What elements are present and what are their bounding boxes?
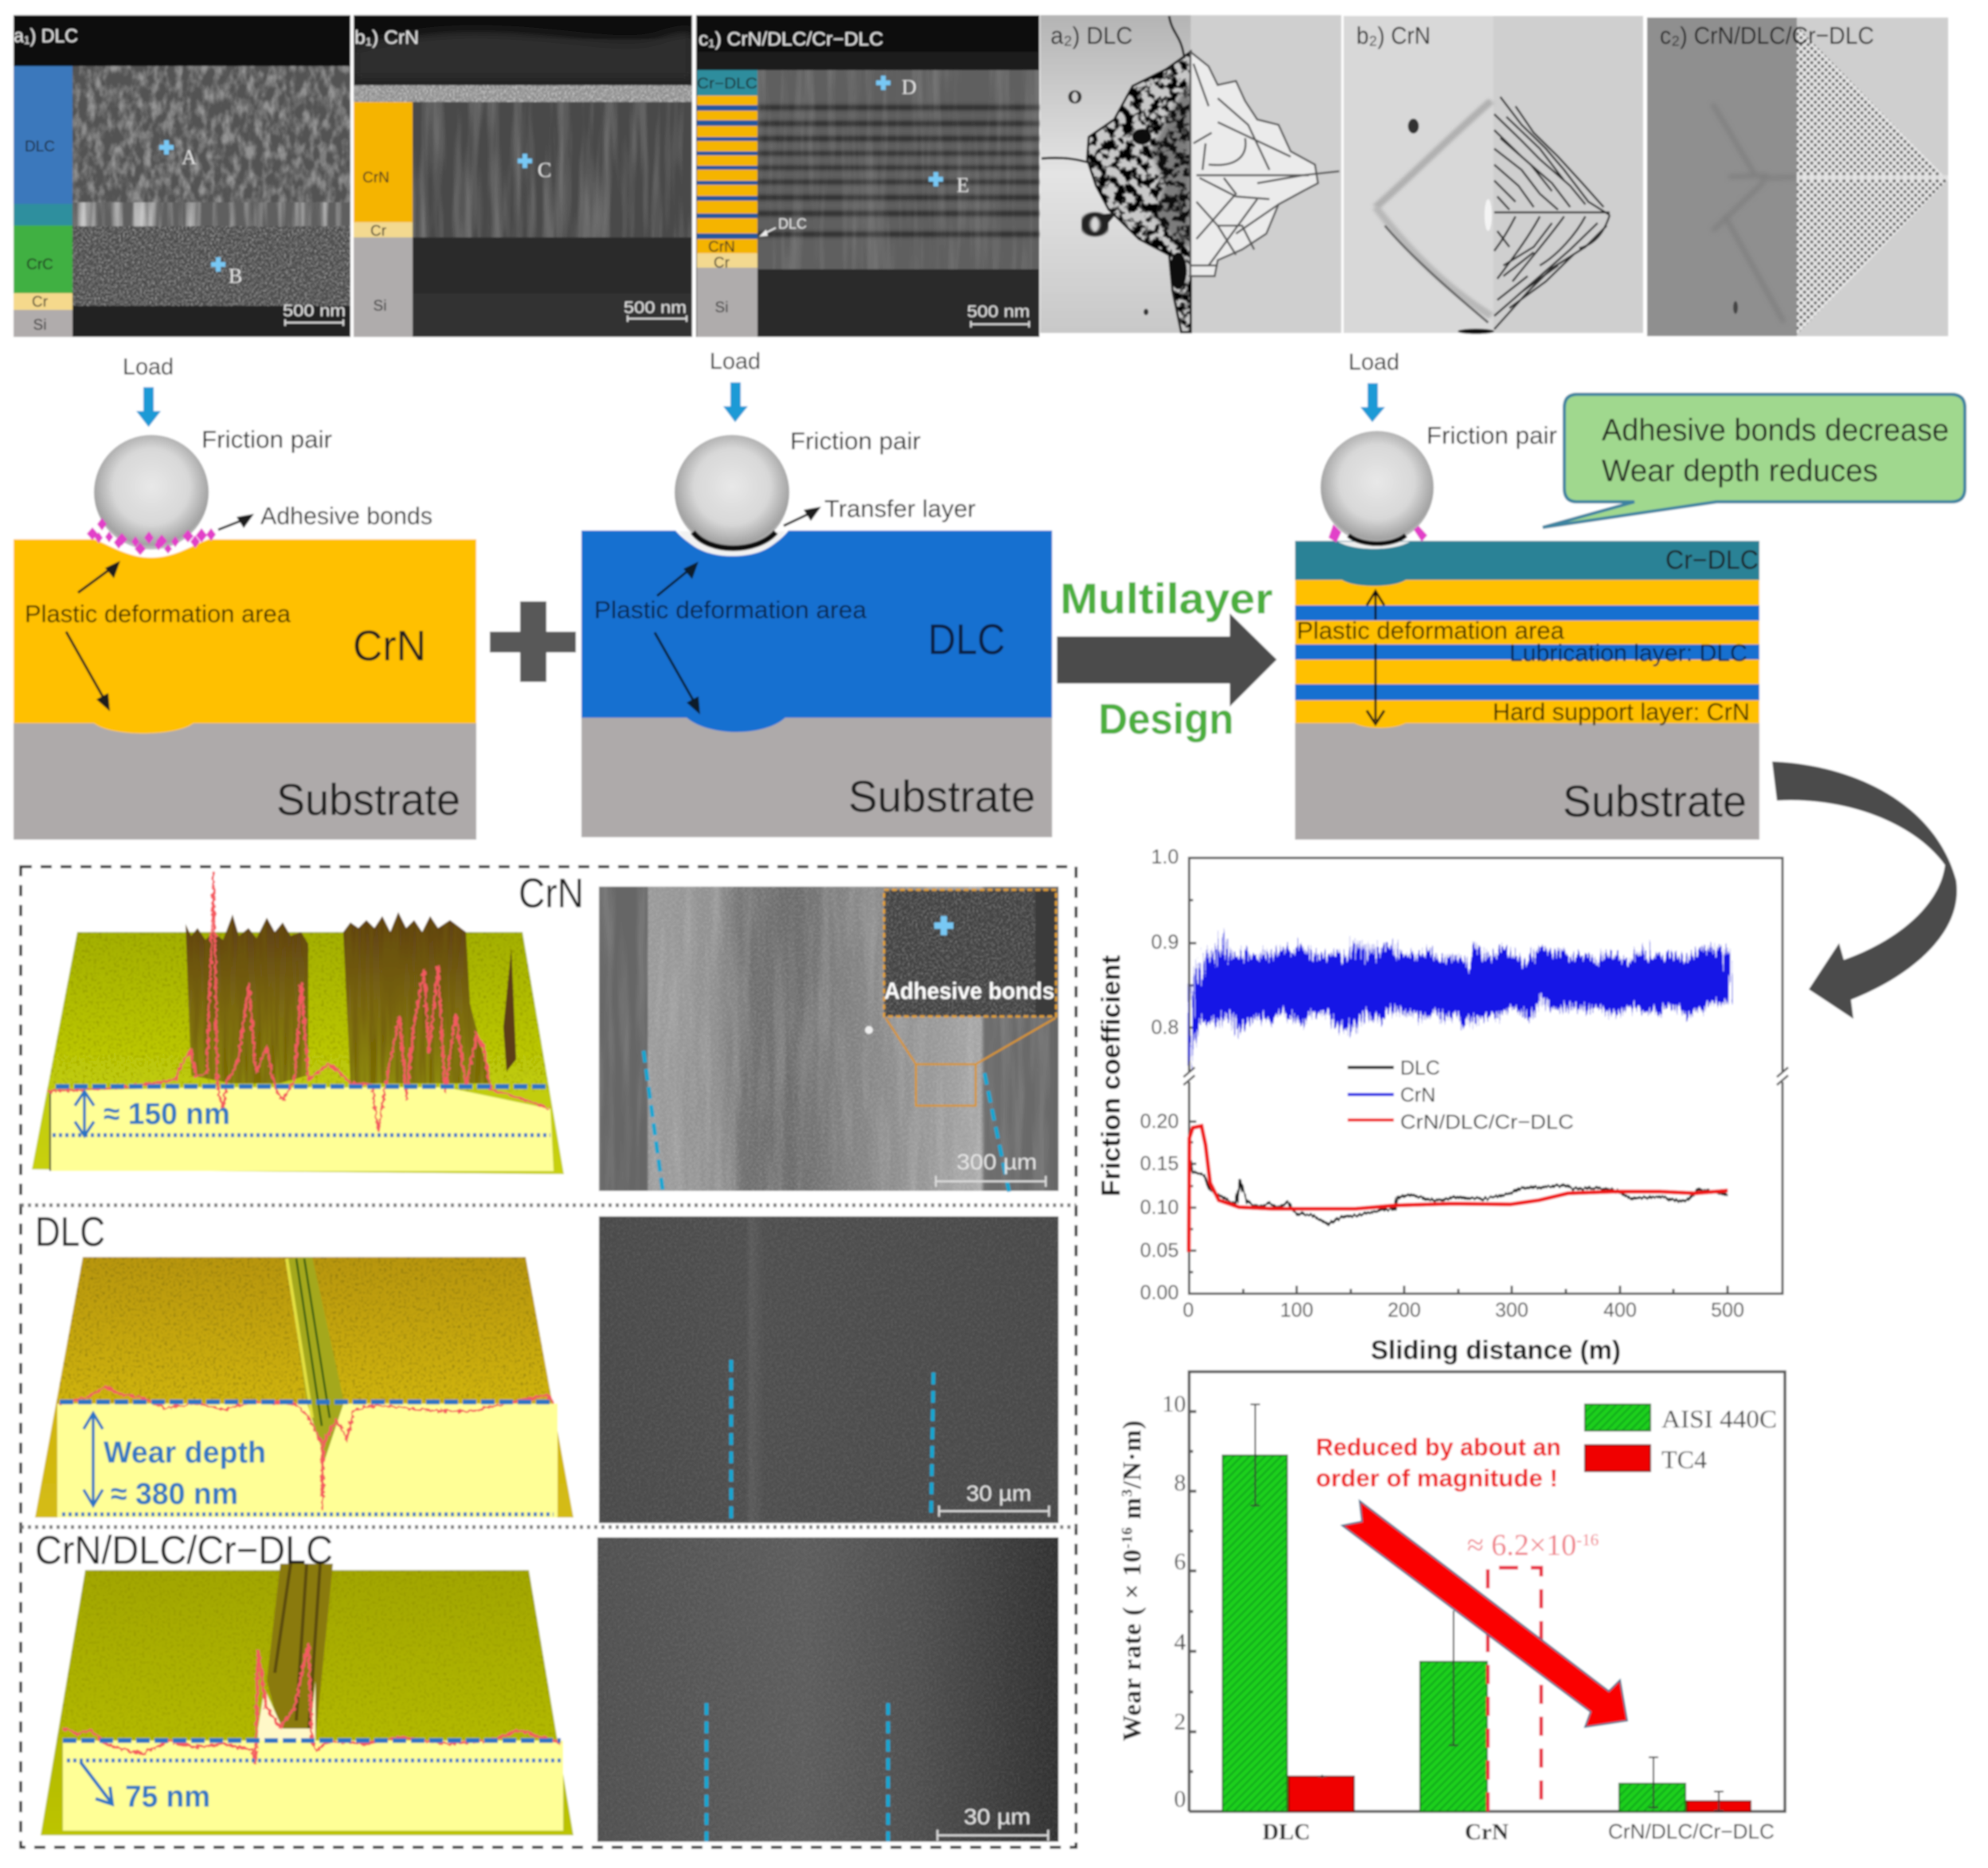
layer labels: CrC <box>26 257 53 273</box>
label: Multilayer: Multilayer <box>1060 575 1273 623</box>
y axis tick labels: 2 <box>1174 1709 1186 1735</box>
scale bar 500 nm <box>283 302 346 326</box>
label: CrN/DLC/Cr-DLC: CrN/DLC/Cr−DLC <box>35 1528 333 1572</box>
callout: plastic deformation area: Plastic deformation area <box>25 600 292 628</box>
series: DLC <box>1189 1149 1728 1224</box>
legend <box>1585 1404 1777 1474</box>
panel: c1 multilayer cross-section SEM <box>696 15 1039 337</box>
y axis tick labels: 0.15 <box>1140 1153 1179 1175</box>
y axis title: 3 <box>1119 1490 1136 1497</box>
label: 380 nm: ≈ 380 nm <box>111 1478 238 1511</box>
wear track edges <box>731 1360 933 1523</box>
legend <box>1348 1057 1574 1134</box>
panel: b1 CrN cross-section SEM <box>354 15 692 337</box>
label: Design: Design <box>1098 695 1234 743</box>
SEM: DLC wear track <box>599 1216 1059 1523</box>
layer labels <box>25 139 55 334</box>
x axis tick labels: 200 <box>1387 1299 1421 1322</box>
layer labels: Si <box>33 317 46 334</box>
bars: DLC <box>1223 1404 1354 1811</box>
panel: wear track comparison <box>21 867 1076 1847</box>
axes <box>1189 1372 1785 1811</box>
annotation: reduced by an order of magnitude: order of magnitude ! <box>1316 1464 1558 1492</box>
callout: transfer layer: Transfer layer <box>824 495 976 523</box>
icon: plus sign <box>490 601 576 682</box>
layer labels: Si <box>715 300 728 316</box>
series: CrN/DLC/Cr-DLC <box>1189 1126 1728 1252</box>
x axis labels: DLC <box>1262 1819 1310 1845</box>
y axis title: -16 <box>1119 1527 1136 1549</box>
panel: a2 DLC indentation <box>1040 15 1341 335</box>
label: a1 DLC: a₁) DLC <box>14 25 78 47</box>
zoom guide box <box>886 1018 1055 1106</box>
icon: friction ball with transfer layer <box>675 435 789 550</box>
label: DLC: DLC <box>928 616 1005 664</box>
y axis tick labels: 8 <box>1174 1470 1186 1496</box>
label: Substrate: Substrate <box>276 774 460 824</box>
legend: CrN <box>1400 1084 1435 1106</box>
scale bar 500 nm: 500 nm <box>624 299 687 317</box>
label: b2 CrN: b₂) CrN <box>1356 22 1430 49</box>
label: wear depth: Wear depth <box>104 1436 266 1470</box>
y axis tick labels: 6 <box>1174 1549 1186 1575</box>
scale bar 30 um <box>937 1804 1048 1841</box>
x axis tick labels: 400 <box>1603 1299 1637 1322</box>
label: Friction pair: Friction pair <box>790 427 921 455</box>
label: 6.2e-16 estimate: -16 <box>1576 1530 1599 1549</box>
wear track edges <box>706 1703 888 1842</box>
markers D and E: D <box>902 76 917 99</box>
wear track edges <box>644 1051 1009 1192</box>
label: Substrate: Substrate <box>848 771 1035 821</box>
y axis title: /N·m) <box>1118 1420 1147 1490</box>
callout: benefits speech bubble <box>1543 394 1965 527</box>
scale bar 30 um: 30 µm <box>966 1481 1031 1506</box>
arrow: reduction trend <box>1342 1501 1627 1727</box>
chart: wear rate bars <box>1118 1372 1785 1845</box>
y axis title: Friction coefficient <box>1096 955 1125 1196</box>
label: hard support layer: Hard support layer: CrN <box>1493 698 1750 726</box>
SEM: CrN wear track <box>599 887 1059 1192</box>
icon: friction ball <box>94 435 209 550</box>
x axis labels: CrN/DLC/Cr−DLC <box>1608 1819 1775 1843</box>
arrow: wear depth multilayer <box>80 1762 112 1804</box>
axes <box>1184 858 1788 1294</box>
label: DLC: DLC <box>35 1209 105 1255</box>
label: 150 nm: ≈ 150 nm <box>104 1098 230 1131</box>
y axis tick labels: 0.9 <box>1151 931 1179 954</box>
arrow: multilayer design <box>1057 613 1277 707</box>
callout: benefits speech bubble: Wear depth reduces <box>1602 454 1878 488</box>
inset: adhesive bonds <box>884 890 1056 1016</box>
y axis tick labels: 0.20 <box>1140 1110 1179 1133</box>
arrow: curved to results <box>1772 762 1957 1019</box>
marker A and B: A <box>182 146 197 169</box>
label: CrN: CrN <box>519 871 584 917</box>
y axis tick labels: 0.05 <box>1140 1239 1179 1262</box>
scale bar 500 nm: 500 nm <box>283 302 346 320</box>
icon: load arrow <box>723 382 748 422</box>
bars: CrN with estimate <box>1420 1568 1541 1811</box>
marker C: C <box>538 159 551 182</box>
callout: adhesive bonds: Adhesive bonds <box>260 502 432 530</box>
icon: adhesive bond particles <box>87 518 216 555</box>
annotation: reduced by an order of magnitude <box>1316 1433 1561 1492</box>
callout: benefits speech bubble: Adhesive bonds decrease <box>1602 413 1949 448</box>
label: Friction pair: Friction pair <box>202 425 332 453</box>
callout: plastic deformation area: Plastic deformation area <box>594 596 867 624</box>
3D profile: CrN/DLC/Cr-DLC <box>41 1564 574 1835</box>
legend: TC4 <box>1661 1445 1707 1474</box>
x axis tick labels: 300 <box>1495 1299 1528 1322</box>
y axis tick labels: 0 <box>1174 1786 1186 1812</box>
label: 6.2e-16 estimate: ≈ 6.2×10 <box>1467 1529 1576 1562</box>
x axis tick labels: 0 <box>1183 1299 1194 1322</box>
x axis tick labels: 500 <box>1711 1299 1744 1322</box>
series: CrN <box>1189 934 1728 1066</box>
y axis tick labels: 10 <box>1162 1391 1186 1417</box>
inset: adhesive bonds: Adhesive bonds <box>884 978 1055 1004</box>
layer labels: Si <box>374 298 386 315</box>
y axis tick labels <box>1140 846 1179 1304</box>
x axis tick labels: 100 <box>1280 1299 1313 1322</box>
schematic: multilayer coating <box>1295 350 1965 840</box>
scale bar 300 um: 300 µm <box>957 1149 1037 1174</box>
3D profile: DLC <box>35 1257 573 1518</box>
label: a2 DLC: a₂) DLC <box>1051 22 1133 49</box>
icon: load arrow <box>1360 383 1385 422</box>
callout: plastic deformation area <box>594 562 867 715</box>
x axis title: Sliding distance (m) <box>1371 1335 1621 1365</box>
arrow: wear depth DLC <box>84 1413 103 1506</box>
callout: plastic deformation area <box>25 561 292 711</box>
label: b1 CrN: b₁) CrN <box>354 27 419 49</box>
label: Load: Load <box>710 349 761 374</box>
label: 75 nm: 75 nm <box>125 1780 210 1814</box>
chart: friction coefficient vs sliding distance <box>1096 846 1788 1365</box>
markers D and E: E <box>957 174 969 197</box>
SEM: multilayer wear track <box>597 1537 1059 1842</box>
legend: CrN/DLC/Cr−DLC <box>1400 1111 1574 1134</box>
y axis tick labels: 0.10 <box>1140 1196 1179 1219</box>
label: Load: Load <box>1348 350 1399 375</box>
3D profile: CrN <box>32 871 565 1174</box>
y axis tick labels: 0.00 <box>1140 1282 1179 1304</box>
double arrow: plastic deformation depth <box>1367 591 1384 724</box>
x axis labels: CrN <box>1465 1819 1509 1845</box>
label: c2 CrN/DLC/Cr-DLC: c₂) CrN/DLC/Cr−DLC <box>1660 22 1874 49</box>
label: Friction pair: Friction pair <box>1426 421 1557 449</box>
label: Substrate: Substrate <box>1563 776 1747 826</box>
label: lubrication layer: Lubrication layer: DLC <box>1509 639 1747 667</box>
layer labels <box>697 76 757 316</box>
layer labels: CrN <box>708 239 735 256</box>
layer labels <box>362 170 389 315</box>
y axis tick labels: 4 <box>1174 1629 1186 1655</box>
marker A and B: B <box>229 264 242 288</box>
label: Load: Load <box>123 354 174 380</box>
scale bar 500 nm <box>967 303 1030 327</box>
schematic: DLC coating <box>581 349 1052 837</box>
panel: a1 DLC cross-section SEM <box>14 15 350 337</box>
legend: DLC <box>1400 1057 1440 1079</box>
layer labels: Cr <box>370 223 387 240</box>
legend: AISI 440C <box>1661 1404 1777 1433</box>
layer labels: Cr <box>714 255 730 272</box>
panel: b2 CrN indentation <box>1344 16 1643 334</box>
y axis title: Wear rate ( × 10 <box>1118 1549 1147 1741</box>
layer labels: CrN <box>362 170 389 186</box>
y axis tick labels: 0.8 <box>1151 1016 1179 1039</box>
callout DLC layer: DLC <box>778 216 807 232</box>
arrow: wear depth CrN <box>75 1091 94 1136</box>
layer labels: Cr−DLC <box>697 76 757 92</box>
x axis labels <box>1262 1819 1775 1845</box>
scale bar 500 nm: 500 nm <box>967 303 1030 321</box>
scale bar 300 um <box>936 1149 1046 1187</box>
scale bar 30 um <box>939 1481 1049 1517</box>
marker A and B <box>159 140 242 288</box>
bars: CrN/DLC/Cr-DLC <box>1619 1757 1751 1811</box>
annotation: reduced by an order of magnitude: Reduced by about an <box>1316 1433 1561 1461</box>
icon: load arrow <box>136 387 161 427</box>
x axis tick labels <box>1183 1299 1744 1322</box>
panel: c2 multilayer indentation <box>1647 18 1948 336</box>
label: Cr-DLC: Cr−DLC <box>1665 545 1759 574</box>
layer labels: DLC <box>25 139 55 155</box>
label: CrN: CrN <box>353 622 426 670</box>
y axis tick labels: 1.0 <box>1151 846 1179 868</box>
label: c1 CrN/DLC/Cr-DLC: c₁) CrN/DLC/Cr−DLC <box>699 29 883 50</box>
layer labels: Cr <box>32 294 49 311</box>
y axis title: m <box>1118 1498 1147 1526</box>
schematic: CrN coating <box>14 354 476 840</box>
scale bar 30 um: 30 µm <box>964 1804 1031 1829</box>
callout DLC layer <box>759 216 807 237</box>
markers D and E <box>876 76 969 197</box>
marker C <box>518 154 551 182</box>
y axis tick labels <box>1162 1391 1186 1812</box>
icon: friction ball with transfer layer <box>1321 431 1434 544</box>
label: plastic deformation area: Plastic deformation area <box>1297 617 1565 644</box>
